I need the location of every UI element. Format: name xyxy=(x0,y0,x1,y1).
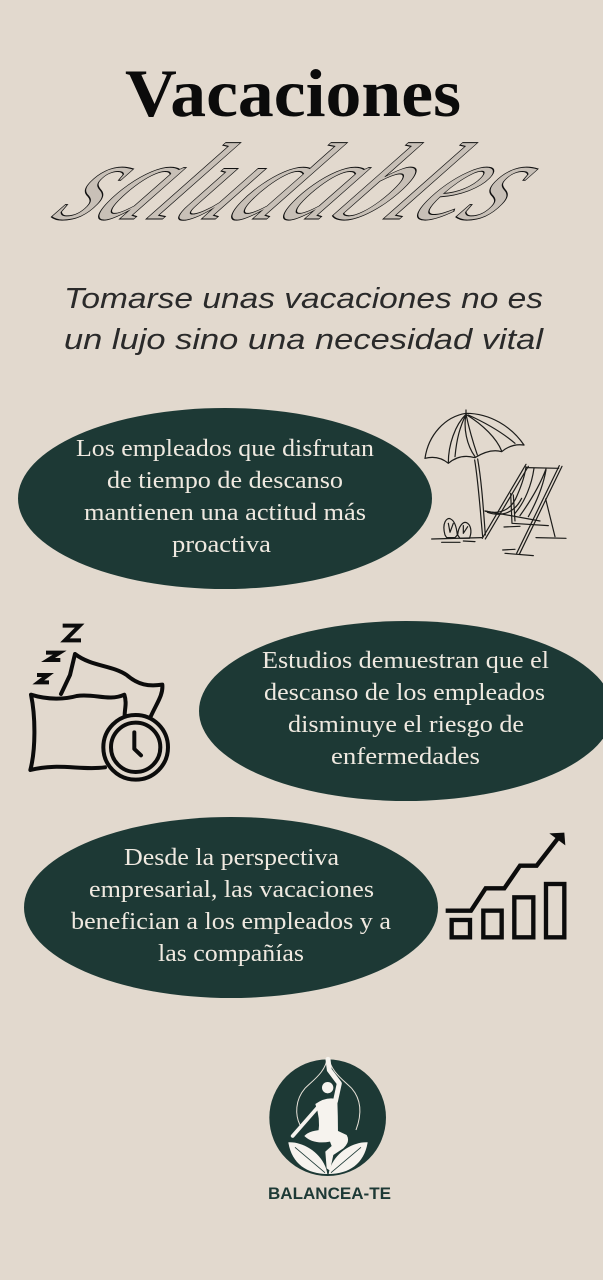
panel: perspectiva empresarial xyxy=(24,817,438,998)
title: Vacaciones: Vacaciones xyxy=(125,55,461,131)
panel: perspectiva empresarial: Desde la perspectiva xyxy=(124,845,339,871)
subtitle: un lujo sino una necesidad vital xyxy=(64,324,545,356)
panel: descanso y enfermedades: enfermedades xyxy=(331,744,480,770)
panel: empleados proactivos: de tiempo de descanso xyxy=(107,468,343,494)
panel: empleados proactivos: Los empleados que disfrutan xyxy=(76,436,374,462)
panel: perspectiva empresarial: benefician a los empleados y a xyxy=(71,909,391,935)
panel: empleados proactivos: mantienen una actitud más xyxy=(84,500,366,526)
logo mark xyxy=(269,1057,386,1176)
panel: perspectiva empresarial: empresarial, las vacaciones xyxy=(89,877,374,903)
panel: empleados proactivos xyxy=(18,408,432,589)
logo wordmark: BALANCEA-TE xyxy=(268,1184,391,1203)
logo: Balancea-te xyxy=(268,1057,391,1203)
title: saludables script: saludables xyxy=(25,121,588,243)
panel: descanso y enfermedades: disminuye el riesgo de xyxy=(288,712,524,738)
panel: descanso y enfermedades xyxy=(199,621,603,801)
icon: growth chart xyxy=(446,833,565,937)
panel: perspectiva empresarial: las compañías xyxy=(158,941,304,967)
subtitle xyxy=(64,283,545,356)
panel: descanso y enfermedades: Estudios demuestran que el xyxy=(262,648,549,674)
panel: empleados proactivos: proactiva xyxy=(172,532,271,558)
subtitle: Tomarse unas vacaciones no es xyxy=(64,283,543,315)
panel: descanso y enfermedades: descanso de los empleados xyxy=(264,680,545,706)
icon: beach umbrella and deck chair xyxy=(425,410,566,556)
icon: zzz xyxy=(37,626,81,682)
icon: pillows, sleep and clock xyxy=(30,626,168,780)
